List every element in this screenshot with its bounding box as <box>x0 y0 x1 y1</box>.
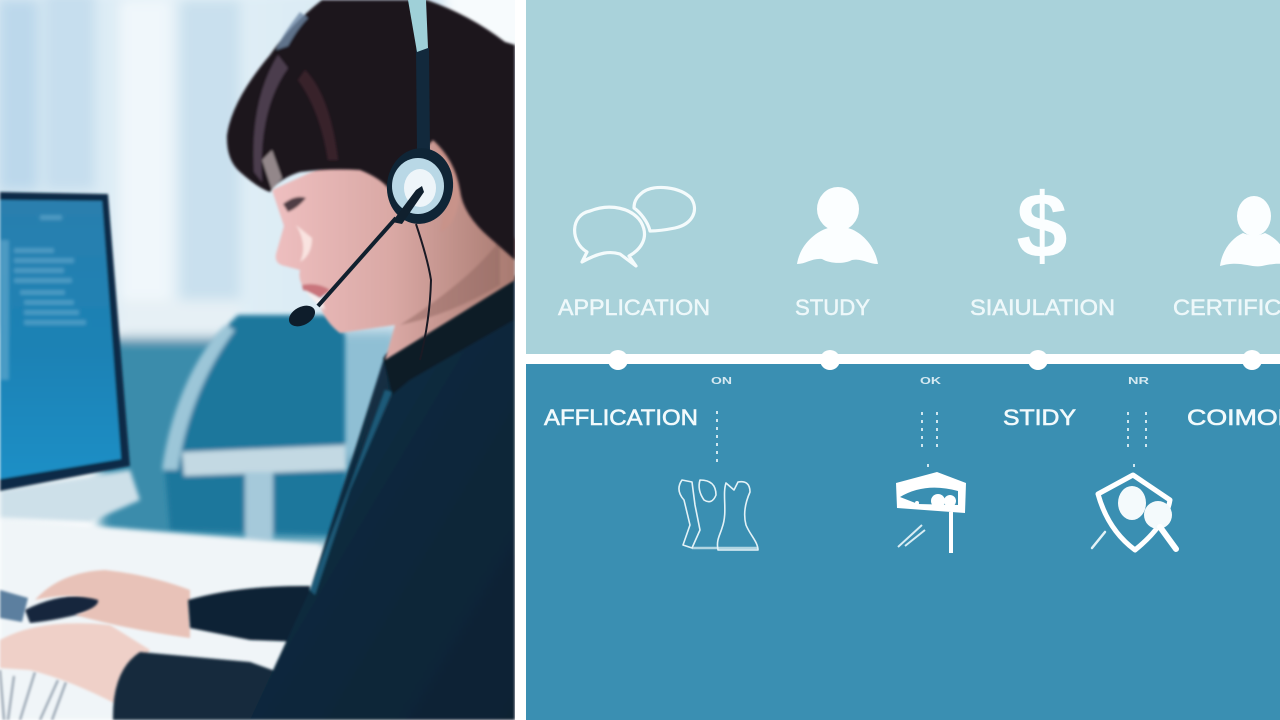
computer monitor <box>0 192 130 491</box>
step label: application: APPLICATION <box>558 295 710 320</box>
desk <box>0 518 320 720</box>
tiny label three: NR <box>1128 376 1150 387</box>
keyboard <box>0 670 66 720</box>
icon: signboard <box>896 472 966 553</box>
on-screen text lines <box>0 215 86 380</box>
icon: two figures <box>679 480 758 550</box>
jacket sleeves and body <box>113 275 515 720</box>
monitor stand shadow <box>0 470 140 522</box>
step label: study: STUDY <box>795 295 870 320</box>
computer mouse <box>0 590 28 622</box>
office chair <box>162 315 347 542</box>
icon: person <box>797 187 878 264</box>
lower label: cut-off: COIMOD <box>1187 405 1280 430</box>
step label: simulation: SIAIULATION <box>970 295 1115 320</box>
hair <box>227 0 515 260</box>
hand on keyboard <box>0 623 150 705</box>
icon: speech bubbles <box>575 187 694 266</box>
icon: person cropped <box>1220 196 1280 266</box>
panel: lower blue band <box>526 364 1280 720</box>
lower label: study: STIDY <box>1003 405 1076 430</box>
tiny label two: OK <box>920 376 942 387</box>
icon: shield with magnifier <box>1092 475 1176 550</box>
timeline nodes <box>608 350 1262 370</box>
lower label: application: AFFLICATION <box>544 405 698 430</box>
panel: upper light-teal steps <box>526 0 1280 720</box>
timeline line <box>526 354 1280 364</box>
tiny label one: ON <box>711 376 732 387</box>
hand on mouse <box>35 570 190 638</box>
photo: call-center agent at computer <box>0 0 525 720</box>
office background <box>0 0 525 543</box>
headset <box>285 0 458 360</box>
dotted connectors <box>717 411 1146 472</box>
neck and face <box>272 130 515 360</box>
icon: dollar sign: $ <box>1016 175 1068 277</box>
